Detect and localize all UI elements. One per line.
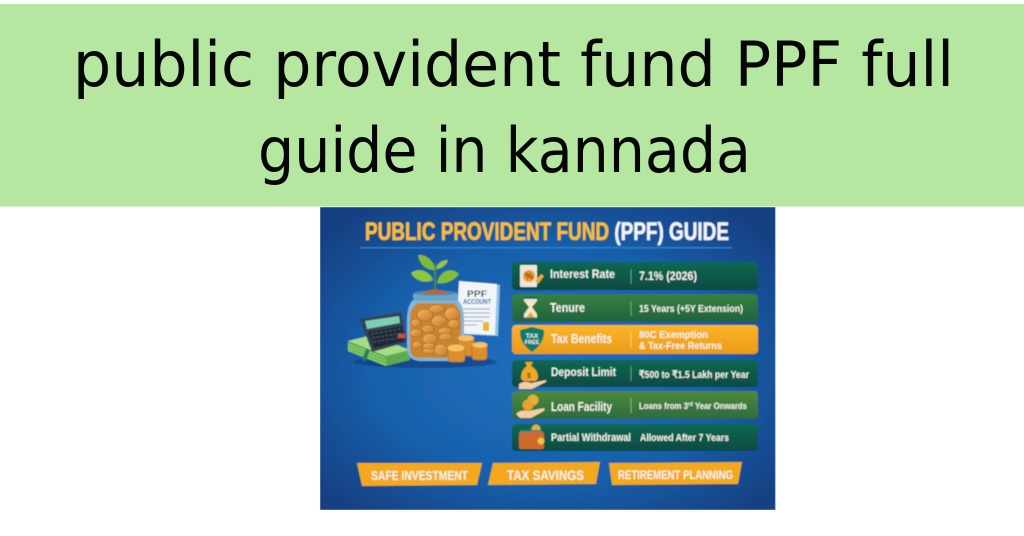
- icon: hourglass: [523, 296, 538, 320]
- row: Tax Benefits: 80C Exemption: [639, 330, 708, 341]
- banner: Safe Investment: SAFE INVESTMENT: [371, 469, 468, 483]
- icon: wallet: [519, 424, 544, 449]
- row: Deposit Limit: [512, 360, 758, 389]
- icon: coin jar: [407, 290, 464, 361]
- row: Tax Benefits: [512, 325, 758, 354]
- icon: calculator: [360, 312, 407, 352]
- icon: tax free shield: [520, 327, 544, 352]
- banner: Retirement Planning: [609, 462, 742, 485]
- row: Interest Rate: [512, 262, 758, 290]
- row: Interest Rate: Interest Rate: [550, 267, 615, 281]
- icon: plant with leaves: [411, 255, 459, 293]
- row: Loan Facility: [512, 391, 758, 419]
- icon: PPF account document: PPF: [467, 289, 487, 300]
- row: Loan Facility: Year Onwards: [693, 401, 747, 412]
- row: Deposit Limit: Deposit Limit: [551, 365, 616, 379]
- icon: percent document: [520, 265, 544, 287]
- row: Deposit Limit: ₹500 to ₹1.5 Lakh per Year: [639, 369, 749, 381]
- banner: Safe Investment: [357, 463, 482, 486]
- row: Loan Facility: Loan Facility: [551, 400, 612, 414]
- banner: Tax Savings: TAX SAVINGS: [507, 467, 584, 483]
- icon: percent document: %: [525, 271, 533, 281]
- icon: cash stack: [348, 335, 410, 366]
- icon: tax free shield: FREE: [525, 340, 540, 346]
- row: Partial Withdrawal: Partial Withdrawal: [551, 432, 631, 444]
- row: Tenure: Tenure: [550, 301, 585, 315]
- title line 2: guide in kannada: [258, 114, 751, 187]
- row: Tenure: [512, 294, 758, 322]
- icon: coins on hand: [516, 394, 545, 418]
- row: Loan Facility: Loans from 3: [639, 401, 699, 412]
- row: Interest Rate: 7.1% (2026): [639, 269, 697, 283]
- icon: PPF account document: ACCOUNT: [463, 299, 492, 306]
- banner: Tax Savings: [488, 462, 600, 485]
- icon: coin stacks: [448, 335, 488, 362]
- icon: money bag on hand: $: [527, 373, 531, 380]
- icon: money bag on hand: [519, 362, 546, 389]
- row: Loan Facility: rd: [688, 402, 693, 408]
- banner: Retirement Planning: RETIREMENT PLANNING: [618, 468, 733, 482]
- row: Partial Withdrawal: Allowed After 7 Years: [640, 432, 729, 444]
- illustration: jar, calculator, cash and document: [348, 255, 500, 368]
- row: Tax Benefits: Tax Benefits: [551, 332, 612, 346]
- panel: PPF guide infographic: [320, 207, 776, 510]
- row: Partial Withdrawal: [512, 424, 758, 451]
- infographic heading: PUBLIC PROVIDENT FUND (PPF) GUIDE: [365, 218, 729, 246]
- icon: tax free shield: TAX: [526, 333, 539, 340]
- title banner: [0, 4, 1024, 206]
- row: Tax Benefits: & Tax-Free Returns: [639, 341, 722, 352]
- row: Tenure: 15 Years (+5Y Extension): [639, 303, 743, 315]
- icon: PPF account document: [456, 281, 500, 336]
- title line 1: public provident fund PPF full: [73, 28, 954, 101]
